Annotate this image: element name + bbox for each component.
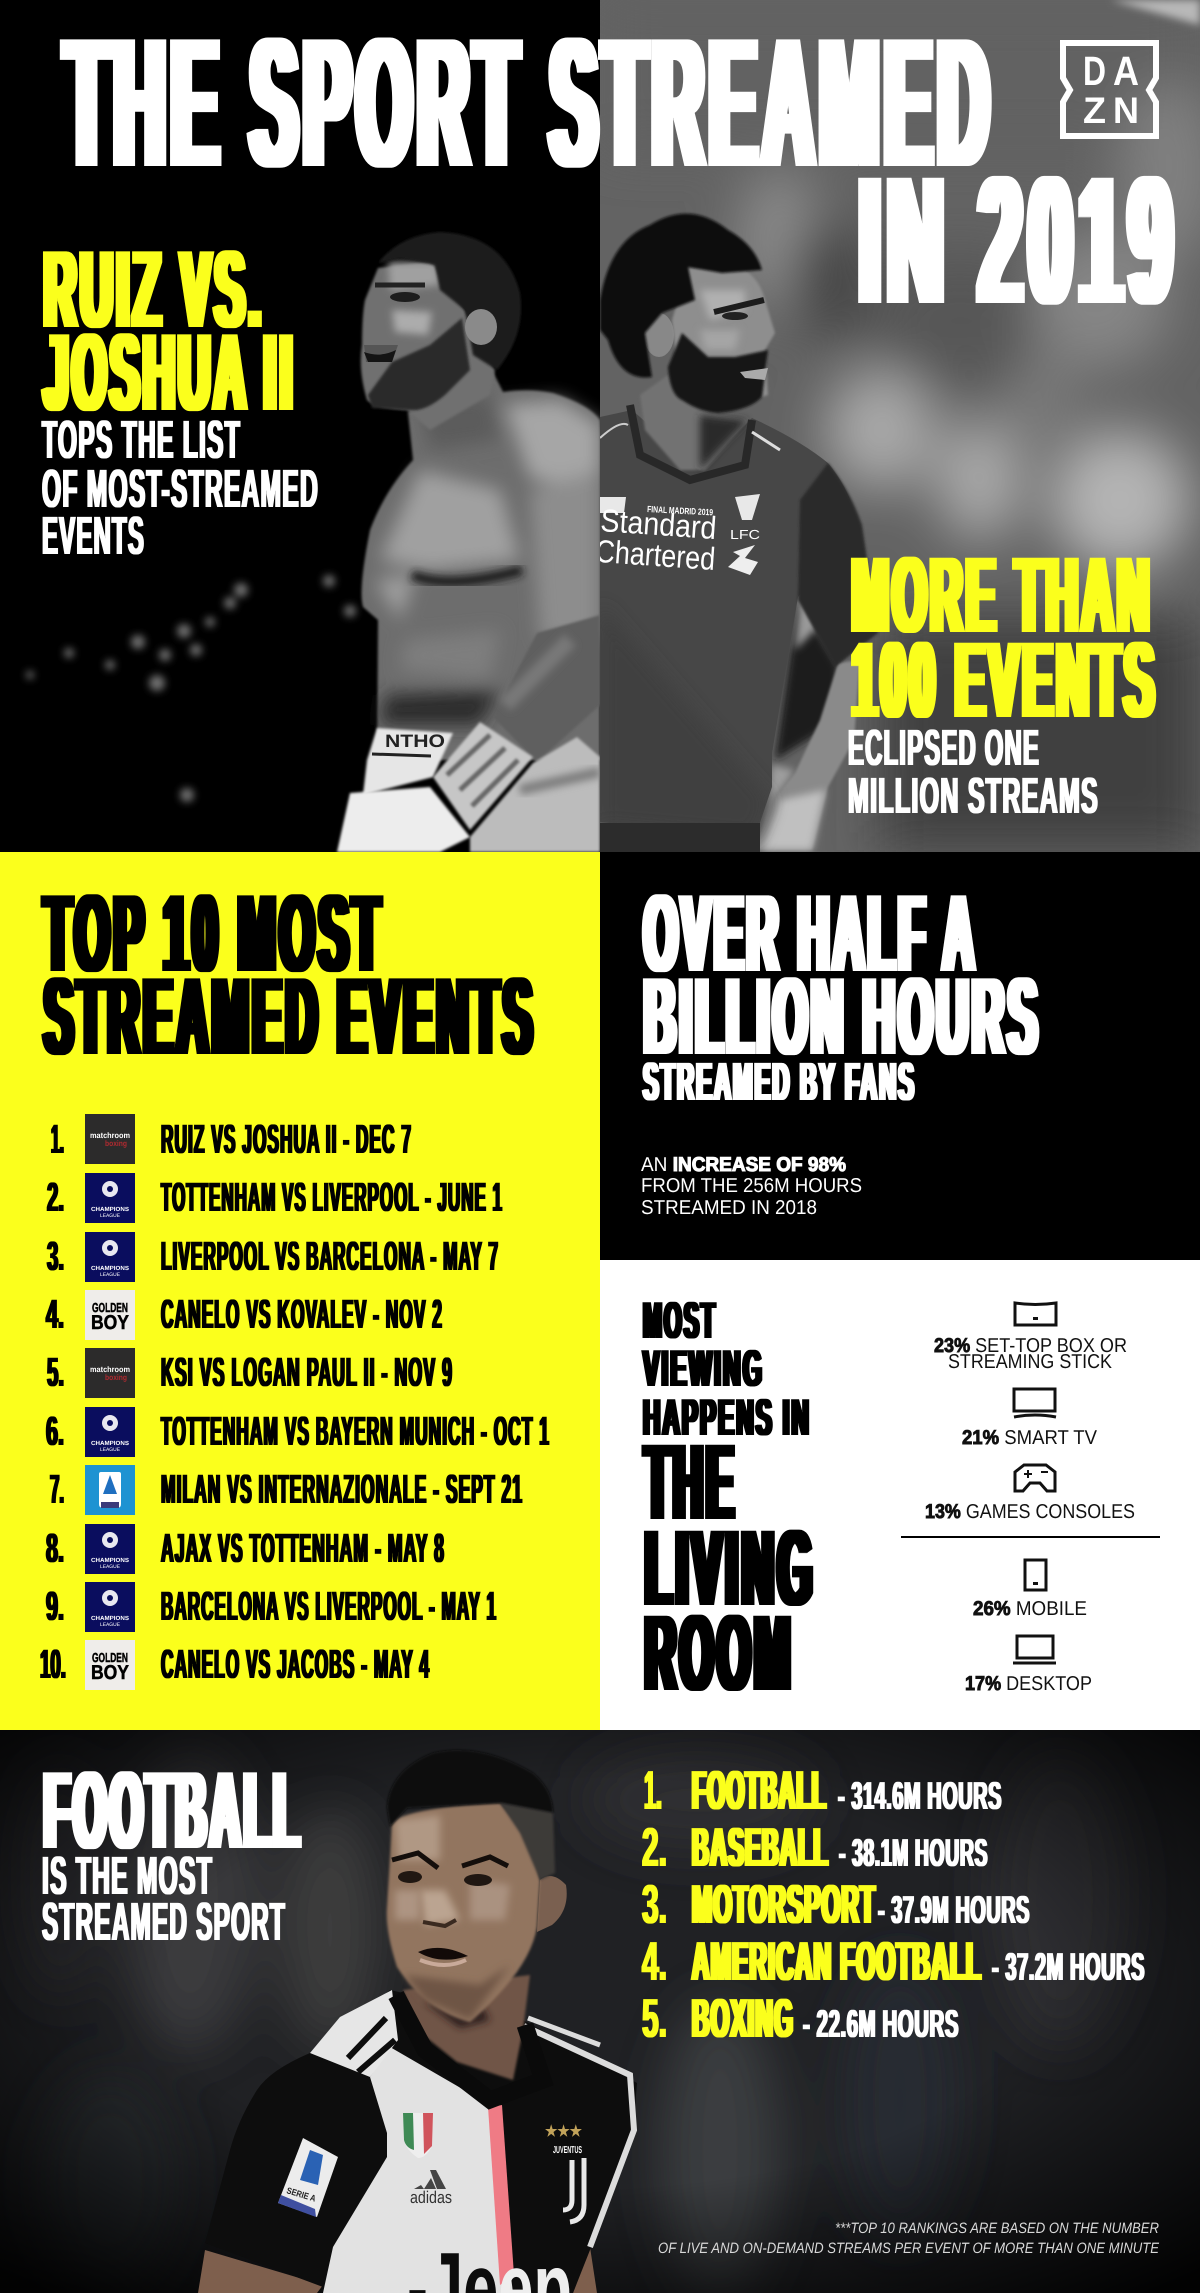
pec underside shadow <box>412 570 522 581</box>
row 9: LEAGUE <box>100 1622 121 1628</box>
beard <box>368 318 470 410</box>
white shoulder <box>310 1990 398 2077</box>
heading: half a billion hours <box>643 872 1041 1112</box>
neck <box>403 1975 530 2080</box>
row 10 <box>40 1640 430 1690</box>
panel: living room: ROOM <box>645 1592 794 1713</box>
row 2: 2. <box>47 1174 64 1220</box>
adidas logo <box>410 2170 452 2207</box>
goatee shadow <box>425 2002 490 2028</box>
row 10: BOY <box>91 1662 130 1684</box>
label: desktop: 17% DESKTOP <box>965 1673 1092 1695</box>
panel: top 10 most streamed events: TOTTENHAM VS LIVERPOOL - JUNE 1 <box>161 1174 503 1220</box>
brows and eyes <box>392 1853 508 1868</box>
text: JOSHUA II <box>44 311 296 434</box>
shorts <box>600 823 760 852</box>
row 3: LEAGUE <box>100 1272 121 1278</box>
sleeve <box>798 463 878 667</box>
glove <box>337 787 470 852</box>
face <box>672 267 775 410</box>
row 1 <box>51 1114 412 1164</box>
face <box>387 1803 540 2022</box>
shoulder trim <box>600 424 628 438</box>
juventus mark <box>545 2123 584 2222</box>
label: set-top box <box>934 1335 1127 1373</box>
row 4: BOY <box>91 1312 130 1334</box>
neck <box>640 375 748 470</box>
row 4: GOLDEN <box>92 1300 128 1315</box>
label: smart tv: 21% SMART TV <box>962 1427 1098 1449</box>
scudetto badge <box>403 2113 433 2158</box>
sport 1: FOOTBALL <box>692 1759 827 1821</box>
panel: football photo <box>0 1730 1200 2293</box>
row 1: matchroom <box>90 1131 130 1140</box>
hair <box>387 1750 553 1827</box>
ear <box>465 309 497 345</box>
text: STREAMED SPORT <box>42 1892 286 1952</box>
shorts <box>363 728 453 795</box>
row 6: 6. <box>46 1408 64 1454</box>
row 2: CHAMPIONS <box>91 1206 129 1213</box>
pink stripe <box>488 2105 514 2285</box>
mouth <box>418 1948 468 1960</box>
text: TOTTENHAM VS BAYERN MUNICH - OCT 1 <box>161 1408 550 1454</box>
sport 3: 3. <box>642 1873 667 1935</box>
arm skin <box>198 2247 597 2293</box>
serie a patch: SERIE A <box>285 2185 317 2204</box>
row 8: CHAMPIONS <box>91 1557 129 1564</box>
row 3 <box>47 1232 499 1282</box>
row 4 <box>46 1290 443 1340</box>
shirt sponsor: Chartered <box>594 533 717 577</box>
boxer body <box>362 372 600 760</box>
icon: DAZN logo: Z <box>1083 90 1106 131</box>
row 4: 4. <box>46 1291 64 1337</box>
row 6: CHAMPIONS <box>91 1440 129 1447</box>
shirt sponsor: FINAL MADRID 2019 <box>647 504 713 517</box>
heading: living room: THE <box>645 1421 737 1542</box>
label: set-top box: STREAMING STICK <box>948 1351 1113 1373</box>
row 9: CHAMPIONS <box>91 1615 129 1622</box>
beard <box>668 333 768 413</box>
heading: living room: VIEWING <box>643 1340 764 1398</box>
shirt sponsor: LFC <box>730 527 760 542</box>
text: increase of 98%: AN INCREASE OF 98% <box>641 1154 846 1176</box>
hair fade <box>500 1803 555 1880</box>
icon: games console <box>1015 1465 1055 1491</box>
adidas logo: adidas <box>410 2188 452 2207</box>
bokeh background <box>722 73 1200 852</box>
panel: boxer photo: NTHO <box>385 731 445 751</box>
label: games consoles: 13% GAMES CONSOLES <box>925 1501 1135 1523</box>
heading: football: IS THE MOST <box>42 1846 213 1906</box>
ear <box>537 1876 567 1932</box>
panel: top 10 most streamed events: KSI VS LOGAN PAUL II - NOV 9 <box>161 1349 453 1395</box>
row 8: LEAGUE <box>100 1564 121 1570</box>
forearm <box>493 615 600 762</box>
row 1: 1. <box>51 1116 64 1162</box>
panel: footballer photo <box>594 0 1200 852</box>
icon: smart tv <box>1014 1389 1056 1417</box>
sport 3: - 37.9M HOURS <box>878 1889 1030 1932</box>
text: FOOTBALL <box>44 1749 303 1872</box>
heading: living room <box>643 1292 816 1713</box>
panel: top 10 most streamed events: LIVERPOOL VS BARCELONA - MAY 7 <box>161 1233 499 1279</box>
sport 5: - 22.6M HOURS <box>803 2003 959 2046</box>
row 5 <box>47 1348 453 1398</box>
text: increase of 98%: FROM THE 256M HOURS <box>641 1175 862 1197</box>
icon: DAZN logo: D <box>1083 48 1106 94</box>
row 8: 8. <box>46 1525 64 1571</box>
text: Ruiz vs. Joshua II <box>42 228 319 566</box>
panel: top 10 most streamed events <box>0 852 600 1730</box>
title <box>65 0 1179 342</box>
heading: football <box>42 1749 303 1952</box>
panel: living room <box>600 1260 1200 1730</box>
nose shadow <box>423 1920 456 1926</box>
shirt sponsor <box>594 494 760 577</box>
bokeh lights <box>26 575 356 802</box>
panel: boxer photo <box>22 231 600 852</box>
row 5: matchroom <box>90 1365 130 1374</box>
panel: living room: HAPPENS IN <box>643 1389 811 1447</box>
sport 4: 4. <box>642 1930 667 1992</box>
row 9: 9. <box>46 1583 64 1629</box>
icon: laptop <box>1013 1636 1056 1663</box>
label: set-top box: 23% SET-TOP BOX OR <box>934 1335 1127 1357</box>
row 2 <box>47 1173 503 1223</box>
text: more than 100 events <box>848 534 1158 824</box>
row 9 <box>46 1582 497 1632</box>
muscle shading <box>375 395 600 725</box>
row 5: boxing <box>105 1373 127 1382</box>
icon: DAZN logo: N <box>1113 90 1139 131</box>
list: most streamed sports: - 38.1M HOURS <box>839 1832 988 1875</box>
shirt <box>600 410 855 837</box>
sport 1: 1. <box>644 1759 662 1821</box>
sport 2: 2. <box>642 1816 667 1878</box>
icon: set-top box <box>1015 1303 1056 1325</box>
juventus mark: ★★★ <box>545 2123 583 2140</box>
collar <box>396 1995 543 2100</box>
text: Ruiz vs. Joshua II: RUIZ VS. <box>44 228 265 351</box>
row 10: GOLDEN <box>92 1650 128 1665</box>
jersey black body <box>205 1990 637 2293</box>
sport 2: BASEBALL <box>692 1816 829 1878</box>
sport 1: - 314.6M HOURS <box>838 1775 1002 1818</box>
hair <box>378 232 521 370</box>
heading: top 10: TOP 10 MOST <box>44 872 384 995</box>
heading: living room: MOST <box>643 1292 717 1350</box>
text: Ruiz vs. Joshua II: EVENTS <box>42 506 145 566</box>
text: increase of 98%: STREAMED IN 2018 <box>641 1197 817 1219</box>
heading: top 10 <box>44 872 536 1078</box>
panel: living room: LIVING <box>645 1507 816 1628</box>
arm and hand <box>755 660 860 850</box>
icon: mobile <box>1025 1560 1046 1590</box>
row 10: 10. <box>40 1641 66 1687</box>
row 2: LEAGUE <box>100 1213 121 1219</box>
panel: half a billion hours <box>600 852 1200 1260</box>
icon: DAZN logo <box>1063 43 1156 136</box>
row 7: 7. <box>50 1466 64 1512</box>
jersey white front <box>323 2047 513 2293</box>
sport 5: 5. <box>642 1987 667 2049</box>
panel: top 10 most streamed events: CANELO VS KOVALEV - NOV 2 <box>161 1291 443 1337</box>
right shoulder piping <box>524 2026 634 2247</box>
collar <box>630 405 752 480</box>
text: OF MOST-STREAMED <box>42 459 319 519</box>
face <box>361 262 495 430</box>
list: most streamed sports <box>642 1759 1145 2049</box>
curly hair <box>600 214 762 378</box>
gap between shirt and arm <box>775 600 840 760</box>
panel: top 10 most streamed events: BARCELONA VS LIVERPOOL - MAY 1 <box>161 1583 497 1629</box>
serie a patch <box>278 2138 338 2217</box>
panel: top 10 most streamed events: RUIZ VS JOSHUA II - DEC 7 <box>161 1116 412 1162</box>
row 7 <box>50 1465 523 1515</box>
row 3: 3. <box>47 1233 64 1279</box>
panel: top 10 most streamed events: MILAN VS INTERNAZIONALE - SEPT 21 <box>161 1466 523 1512</box>
juventus mark: JUVENTUS <box>553 2145 582 2156</box>
text: Ruiz vs. Joshua II: TOPS THE LIST <box>42 410 241 470</box>
row 1: boxing <box>105 1139 127 1148</box>
footnote <box>658 2220 1160 2257</box>
row 6 <box>46 1407 550 1457</box>
shirt sponsor: Standard <box>599 502 718 546</box>
text: increase of 98% <box>641 1154 862 1219</box>
panel: top 10 most streamed events: AJAX VS TOTTENHAM - MAY 8 <box>161 1525 445 1571</box>
row 8 <box>46 1524 445 1574</box>
label: mobile: 26% MOBILE <box>973 1598 1087 1620</box>
panel: top 10 most streamed events: CANELO VS JACOBS - MAY 4 <box>161 1641 430 1687</box>
row 6: LEAGUE <box>100 1447 121 1453</box>
ear <box>644 313 674 357</box>
footnote: ***TOP 10 RANKINGS ARE BASED ON THE NUMBER <box>835 2220 1159 2237</box>
sport 5: BOXING <box>692 1987 794 2049</box>
row 3: CHAMPIONS <box>91 1265 129 1272</box>
icon: DAZN logo: A <box>1113 48 1139 94</box>
row 5: 5. <box>47 1349 64 1395</box>
sport 3: MOTORSPORT <box>692 1873 876 1935</box>
